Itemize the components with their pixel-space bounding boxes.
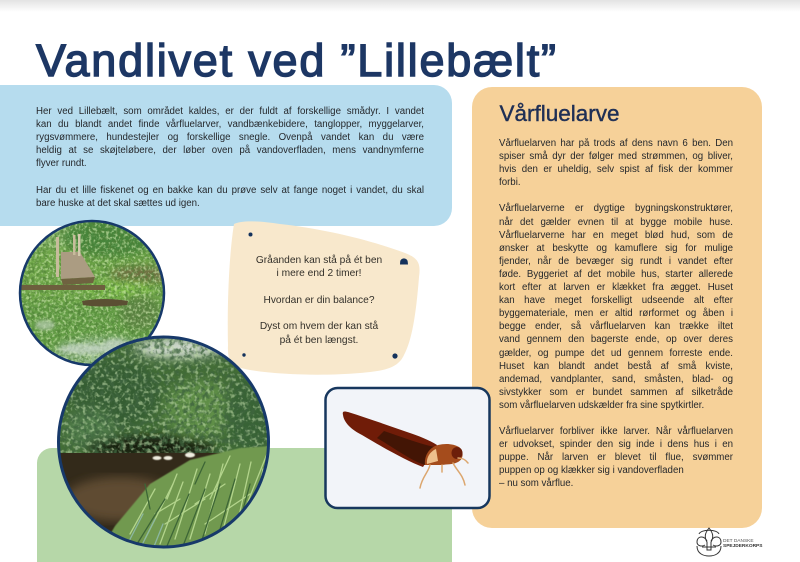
- reeds: [112, 446, 267, 546]
- logo text: SPEJDERKORPS: [723, 544, 762, 549]
- title: Vandlivet ved ”Lillebælt”: [36, 35, 556, 86]
- article text: er udvokset, spinder den sig inde i dens hus i en: [499, 439, 733, 450]
- intro text block: flyver rundt.: [36, 158, 87, 169]
- article text: Vårfluelarverne er dygtige bygningskonstruktører,: [499, 203, 733, 214]
- article text: føde. Byggeriet af det mobile hus, starter allerede: [499, 269, 733, 280]
- article text: gælder, og pumpe det ud gennem forreste ende.: [499, 348, 733, 358]
- article text: andemad, vandplanter, sand, småsten, blad- og: [499, 374, 733, 385]
- article text: ønsker at beskytte og kamuflere sig for mulige: [499, 243, 733, 254]
- article text: Vårfluelarver forbliver ikke larver. Når vårfluelarven: [499, 426, 733, 437]
- intro text block: [36, 106, 424, 209]
- logo text: DET DANSKE: [723, 539, 754, 544]
- fact text: [256, 254, 382, 346]
- article text: som vårfluelarven udskælder fra sine spytkirtler.: [499, 400, 704, 411]
- article text: – nu som vårflue.: [499, 478, 573, 489]
- intro text block: bare huske at det skal sættes ud igen.: [36, 198, 200, 209]
- article text: puppen op og klækker sig i vandoverfladen: [499, 465, 684, 476]
- dock: [20, 234, 128, 306]
- article text: når det gælder evnen til at bygge mobile huse.: [499, 217, 733, 228]
- intro text block: Har du et lille fiskenet og en bakke kan du prøve selv at fange noget i vandet, du skal: [36, 185, 424, 196]
- fact text: i mere end 2 timer!: [277, 268, 361, 279]
- fact text: Hvordan er din balance?: [263, 295, 374, 306]
- intro text block: rygsvømmere, hundestejler og forskellige snegle. Ovenpå vandet kan du være: [36, 132, 424, 143]
- article text: forbi.: [499, 177, 521, 188]
- panel: Vårfluelarve: [472, 87, 762, 528]
- article text: hvis den er uheldig, selv spist af fisk der kommer: [499, 164, 733, 175]
- article text: sivstykker som er bundet sammen af silketråde: [499, 387, 733, 398]
- article text: [499, 138, 733, 489]
- article text: kort efter at larven er klækket fra ægget. Huset: [499, 282, 733, 293]
- logo: scout emblem: [696, 527, 722, 556]
- decorative dots on blob: [242, 232, 408, 359]
- swans: [152, 452, 195, 460]
- panel: cream fact blob: [228, 221, 420, 375]
- fact text: Dyst om hvem der kan stå: [260, 321, 378, 332]
- fact text: på ét ben længst.: [280, 335, 358, 346]
- water: [60, 453, 221, 532]
- intro text block: heldig at se skøjteløbere, der løber oven på vandoverfladen, mens vandnymferne: [36, 145, 424, 156]
- article text: puppe. Når larven er blevet til flue, svømmer: [499, 452, 733, 463]
- photo: footbridge circle: [18, 220, 166, 366]
- article text: byggemateriale, men er altid rørformet og åben i: [499, 308, 733, 319]
- panel: green background block: [37, 448, 452, 562]
- heading: Vårfluelarve: [500, 101, 620, 126]
- article text: spiser små dyr der følger med strømmen, og bliver,: [499, 151, 733, 162]
- intro text block: kan du blandt andet finde vårfluelarver, vandbænkebidere, tanglopper, myggelarver,: [36, 119, 424, 130]
- article text: begge ender, så vårfluelarven kan trække iltet: [499, 321, 733, 332]
- article text: Vårfluelarven har på trods af dens navn 6 ben. Den: [499, 138, 733, 149]
- article text: kan have meget forskelligt udseende alt efter: [499, 295, 733, 306]
- fact text: Gråanden kan stå på ét ben: [256, 255, 382, 266]
- article text: vand gennem den bagerste ende, op over deres: [499, 334, 733, 345]
- icon: larva: [343, 411, 468, 488]
- photo: lake with swans circle: [57, 336, 270, 548]
- intro text block: Her ved Lillebælt, som området kaldes, er der fuldt af forskellige smådyr. I vandet: [36, 106, 424, 117]
- panel: intro text: [0, 85, 452, 226]
- logo text: [723, 539, 762, 549]
- photo card: caddisfly larva: [324, 386, 491, 510]
- article text: Huset kan blandt andet bestå af små kviste,: [499, 361, 733, 372]
- article text: Vårfluelarverne har en meget blød hud, som de: [499, 230, 733, 241]
- article text: fjender, når de bevæger sig rundt i vandet efter: [499, 256, 733, 267]
